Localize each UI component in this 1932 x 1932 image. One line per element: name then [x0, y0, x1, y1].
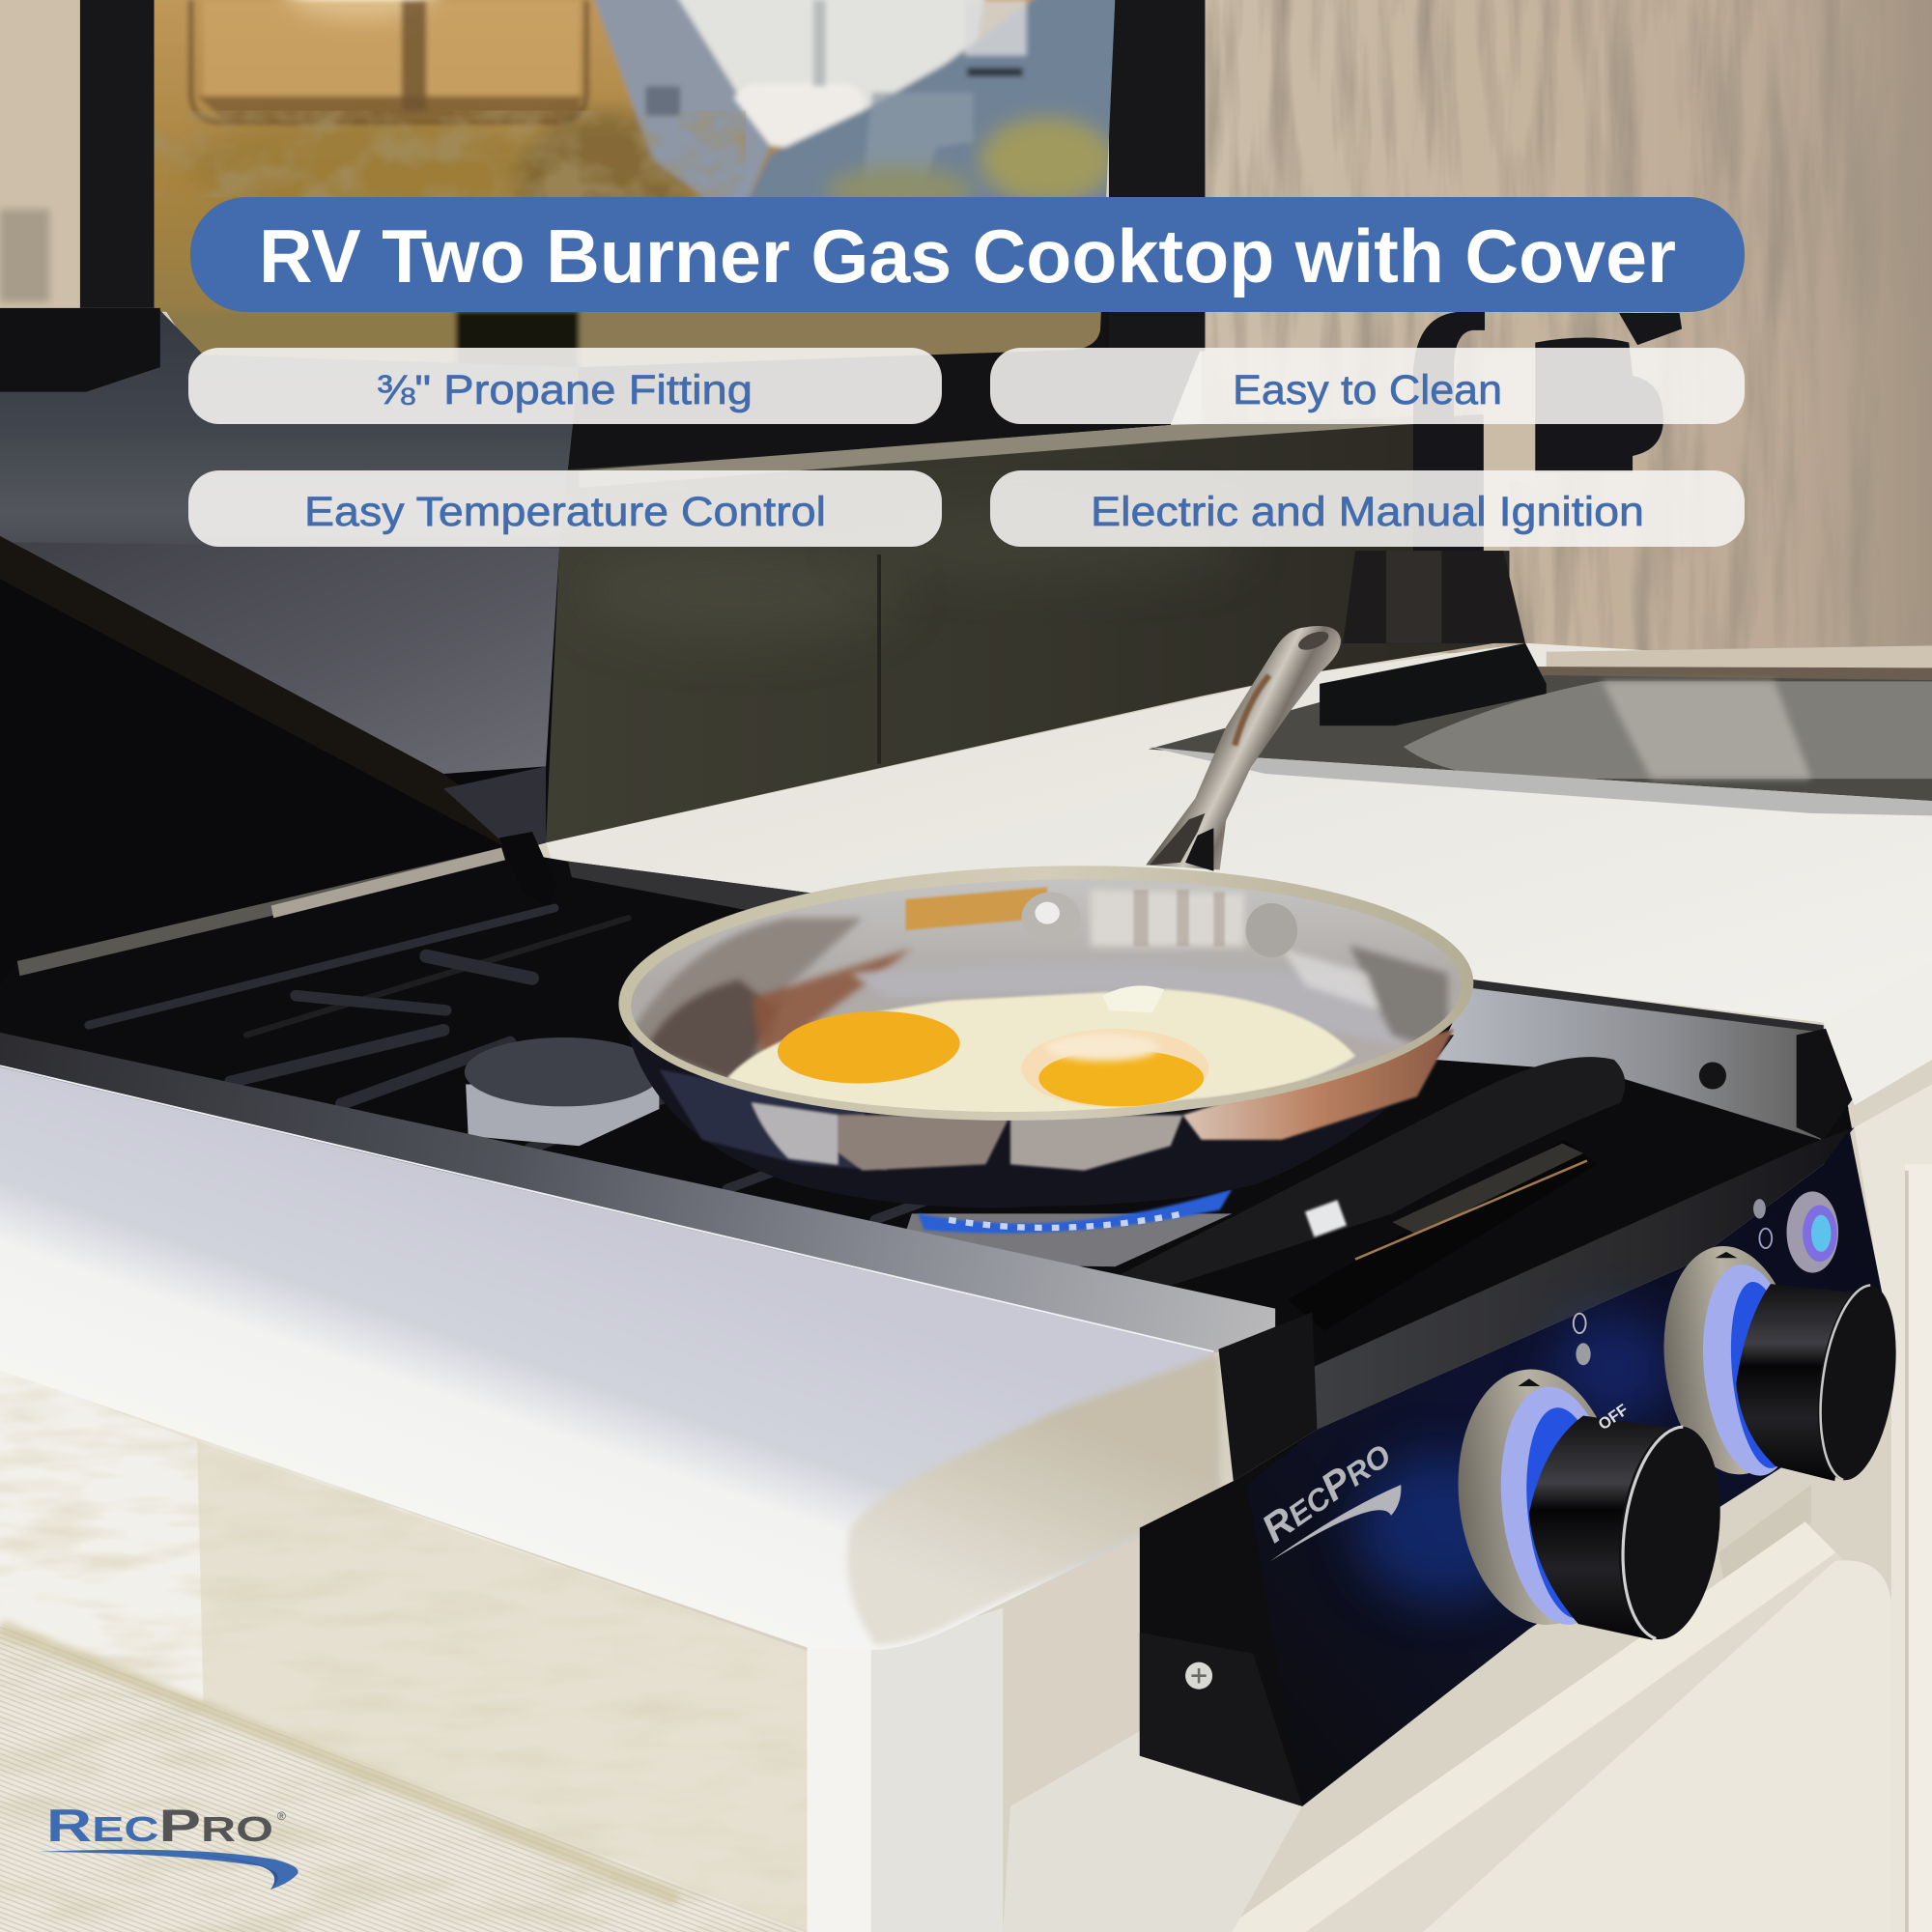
feature: propane fitting: ⅜" Propane Fitting — [377, 367, 753, 413]
frying pan — [615, 626, 1479, 1208]
window frame and sill — [80, 0, 1205, 473]
pan body — [629, 1035, 1454, 1208]
sink — [1149, 645, 1932, 815]
right grate — [1119, 1057, 1625, 1288]
rivets — [1021, 892, 1297, 957]
window view: forest, mountains and interior reflection — [142, 0, 1127, 370]
feature: ignition — [990, 470, 1745, 547]
knob two — [1653, 1239, 1907, 1485]
yolk one — [777, 1010, 960, 1084]
left burner — [465, 1037, 662, 1146]
cooktop basin and grates — [0, 832, 1855, 1386]
back countertop — [546, 643, 1932, 1023]
feature: propane fitting — [188, 348, 942, 424]
knob label: OFF — [1595, 1401, 1632, 1434]
registered mark: ® — [277, 1809, 286, 1823]
faucet — [1320, 312, 1682, 725]
power button — [1786, 1191, 1838, 1273]
wood wall: right — [1202, 0, 1932, 653]
knob one — [1446, 1361, 1731, 1645]
indicator dots — [1574, 1199, 1772, 1365]
back steel rail — [1435, 980, 1855, 1140]
right side counter and cabinets — [1220, 961, 1932, 1932]
feature: easy to clean: Easy to Clean — [1233, 367, 1502, 413]
panel fascia — [1306, 1127, 1855, 1430]
feature: ignition: Electric and Manual Ignition — [1091, 489, 1644, 535]
pan handle — [1146, 626, 1341, 871]
lower wood cabinet — [0, 1355, 1302, 1932]
panel face — [1247, 1130, 1893, 1806]
pan rim — [615, 855, 1477, 1131]
feature: temperature control: Easy Temperature Control — [304, 489, 826, 535]
panel base — [1140, 1430, 1355, 1806]
feature: easy to clean — [990, 348, 1745, 424]
side bracket — [1218, 1312, 1318, 1481]
cover lip — [17, 848, 505, 976]
front countertop — [0, 1067, 1220, 1650]
control panel — [1140, 1127, 1907, 1806]
yolk two — [1021, 1029, 1208, 1108]
title text: RV Two Burner Gas Cooktop with Cover — [259, 213, 1676, 298]
cover hinge — [499, 832, 557, 905]
wood wall: left — [0, 0, 89, 308]
eggs — [727, 985, 1355, 1116]
logo swoosh — [39, 1850, 298, 1889]
wood behind faucet — [1484, 352, 1535, 551]
pan interior — [631, 879, 1461, 1112]
screw — [1185, 1662, 1212, 1690]
burner flame — [905, 1189, 1233, 1266]
countertop end face — [847, 1353, 1220, 1645]
front steel strip — [0, 1033, 1275, 1353]
panel logo: RECPRO — [1254, 1431, 1399, 1551]
right burner glossy cap — [1288, 1140, 1597, 1331]
glass cover — [0, 308, 579, 985]
concrete backsplash — [546, 412, 1509, 842]
feature: temperature control — [188, 470, 942, 547]
brand logo — [39, 1800, 298, 1889]
back lip — [568, 862, 813, 918]
title banner — [190, 197, 1745, 312]
logo wordmark: R EC P RO — [46, 1800, 273, 1851]
